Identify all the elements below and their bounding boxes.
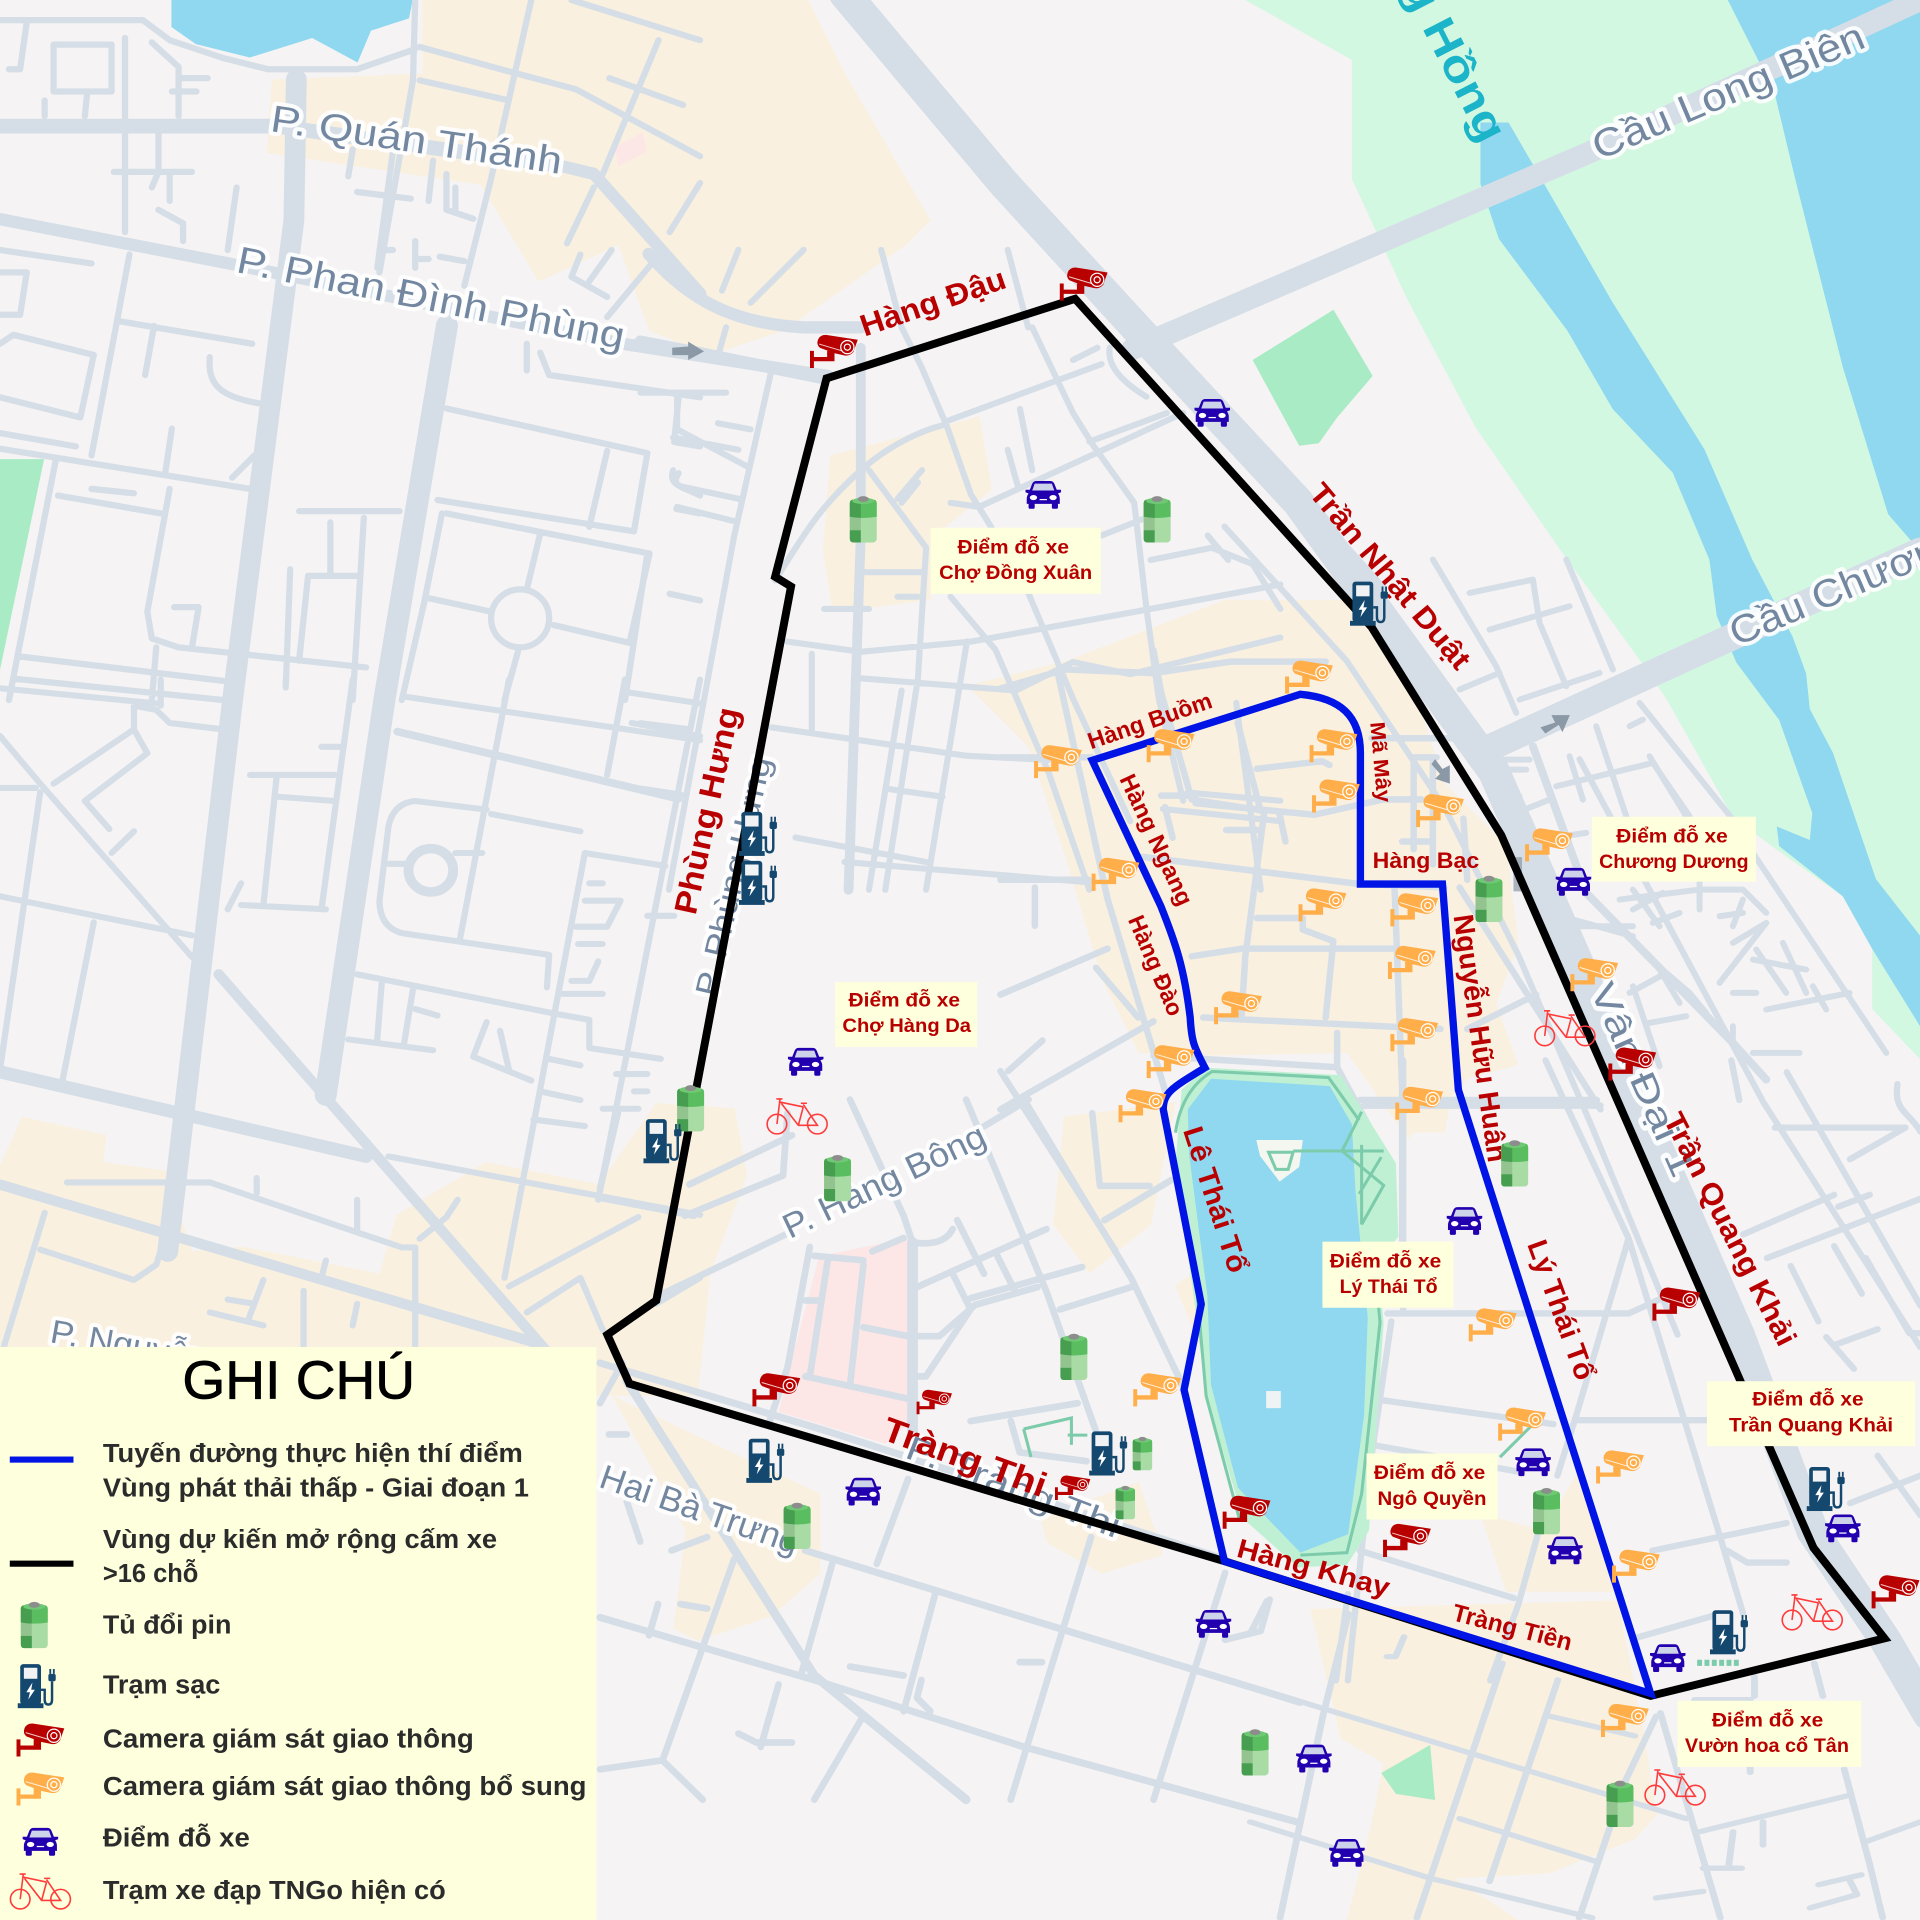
legend text: additional camera: Camera giám sát giao thông bổ sung: [103, 1773, 587, 1801]
map: main river east: [1728, 0, 1920, 551]
callout: Vườn hoa cổ Tân parking: Vườn hoa cổ Tân: [1685, 1736, 1849, 1757]
icons: battery swap cabinets: [677, 496, 1633, 1827]
street label: Hàng Ngang: Hàng Ngang: [1115, 770, 1198, 910]
road: Long Biên bridge: [1133, 0, 1920, 349]
icons: parking points: [788, 399, 1861, 1867]
callout: Ngô Quyền parking: Ngô Quyền: [1378, 1489, 1487, 1510]
legend icon: parking: [23, 1828, 58, 1856]
road: P. Phan Đình Phùng: [0, 219, 828, 376]
lake path: [1176, 1071, 1384, 1555]
route: pilot low-emission zone (blue): [1092, 694, 1651, 1693]
icons: TNGo bike stations: [767, 1011, 1842, 1805]
street label: Trần Nhật Duật: Trần Nhật Duật: [1302, 477, 1477, 676]
legend: black line swatch: [10, 1561, 73, 1567]
map label: Cầu Long Biên: Cầu Long Biên: [1586, 15, 1871, 169]
map: Red River channel: [1480, 122, 1920, 1026]
street label: Lê Thái Tổ: Lê Thái Tổ: [1177, 1122, 1254, 1276]
legend icon: charger: [18, 1664, 56, 1708]
callout: Trần Quang Khải parking: Điểm đỗ xe: [1752, 1389, 1864, 1411]
legend text: pilot route: Tuyến đường thực hiện thí điểm: [103, 1440, 523, 1468]
street label: Hàng Bạc: Hàng Bạc: [1373, 848, 1479, 873]
legend text: expansion zone: [103, 1526, 497, 1588]
legend text: pilot route: [103, 1440, 529, 1502]
map label: P. Phùng Hưng: P. Phùng Hưng: [688, 753, 778, 1000]
callout: Lý Thái Tổ parking: [1322, 1242, 1453, 1308]
red street labels: [667, 262, 1803, 1656]
legend: blue line swatch: [10, 1457, 73, 1463]
small green path near Cửa Nam: [1024, 1418, 1087, 1457]
callout: Chương Dương parking: Chương Dương: [1599, 852, 1749, 873]
map label: Văn Đại: Vân Đại 1: [1582, 976, 1703, 1183]
callout: Ngô Quyền parking: Điểm đỗ xe: [1374, 1462, 1485, 1484]
callout: Trần Quang Khải parking: Trần Quang Khải: [1729, 1415, 1893, 1436]
legend icon: battery: [21, 1602, 48, 1648]
legend text: camera: Camera giám sát giao thông: [103, 1725, 474, 1753]
street label: Lý Thái Tổ: Lý Thái Tổ: [1521, 1236, 1601, 1384]
road: diagonal Quán Thánh: [558, 165, 700, 294]
callout: Chợ Đồng Xuân parking: [931, 528, 1101, 594]
legend text: expansion zone: Vùng dự kiến mở rộng cấm xe: [103, 1526, 497, 1554]
park around lake: [1176, 1068, 1398, 1567]
legend text: battery: Tủ đổi pin: [103, 1611, 231, 1639]
map: West Lake corner: [171, 0, 413, 62]
legend icon: camera: [17, 1723, 64, 1757]
callout: Chợ Hàng Da parking: Chợ Hàng Da: [842, 1016, 971, 1037]
street label: Hàng Đậu: Hàng Đậu: [856, 262, 1010, 343]
legend icon: additional camera: [17, 1772, 64, 1806]
map label: P. Nguyễn: P. Nguyễn: [48, 1312, 211, 1378]
callout: Chợ Hàng Da parking: [835, 982, 977, 1047]
icons: charging stations: [643, 582, 1845, 1654]
small garden near Vườn hoa: [1697, 1660, 1739, 1665]
map: small pink block: [615, 132, 647, 167]
callout: Chương Dương parking: [1592, 817, 1756, 882]
map label: P. Tràng Thi: P. Tràng Thi: [901, 1429, 1126, 1546]
green path near Ngô Quyền: [1500, 1418, 1538, 1457]
legend panel: [0, 1347, 596, 1920]
Hoàn Kiếm lake and park: [1176, 1068, 1398, 1567]
route: proposed expansion zone (black): [607, 299, 1884, 1696]
callout: Ngô Quyền parking: [1367, 1453, 1498, 1520]
road: Trần Nhật Duật / Trần Quang Khải arterial: [845, 0, 1920, 1714]
street label: Hàng Buồm: Hàng Buồm: [1084, 687, 1215, 754]
icons: traffic cameras: [752, 268, 1919, 1608]
lake water: [1188, 1079, 1368, 1553]
road: left avenue: [168, 80, 296, 1251]
legend text: bike: Trạm xe đạp TNGo hiện có: [103, 1877, 446, 1905]
callout: Chợ Đồng Xuân parking: Chợ Đồng Xuân: [939, 563, 1092, 584]
street label: Phùng Hưng: Phùng Hưng: [667, 704, 746, 917]
street label: Tràng Thi: Tràng Thi: [878, 1411, 1052, 1505]
direction arrows on map: [672, 342, 1570, 891]
map: parks: [0, 310, 1435, 1800]
map: hospital block: [779, 1238, 912, 1444]
map label: P. Phan Đình Phùng: P. Phan Đình Phùng: [233, 239, 628, 358]
callout: Vườn hoa cổ Tân parking: Điểm đỗ xe: [1712, 1710, 1823, 1732]
street label: Mã Mây: Mã Mây: [1365, 721, 1395, 804]
street label: Tràng Tiền: Tràng Tiền: [1450, 1600, 1575, 1656]
road: right avenue: [326, 326, 447, 1095]
street label: Hàng Đào: Hàng Đào: [1123, 911, 1189, 1020]
road: P. Quán Thánh: [0, 126, 558, 165]
road: side carriageways: [1139, 318, 1920, 1347]
map: river bank vegetation: [1245, 0, 1920, 1059]
icons: additional traffic cameras: [1034, 661, 1660, 1737]
legend text: expansion zone: >16 chỗ: [103, 1558, 198, 1588]
legend text: charger: Trạm sạc: [103, 1671, 220, 1699]
street label: Trần Quang Khải: Trần Quang Khải: [1657, 1107, 1803, 1351]
legend text: parking: Điểm đỗ xe: [103, 1823, 250, 1853]
map label: P. Quán Thánh: P. Quán Thánh: [268, 98, 565, 183]
callout: Lý Thái Tổ parking: Điểm đỗ xe: [1330, 1250, 1441, 1272]
road: Chương Dương bridge: [1491, 551, 1920, 747]
legend icon: bike: [10, 1874, 70, 1909]
square monument on lake: [1266, 1391, 1281, 1408]
street label: Hàng Khay: Hàng Khay: [1234, 1533, 1393, 1603]
callout: Trần Quang Khải parking: [1707, 1381, 1915, 1446]
callout: Chương Dương parking: Điểm đỗ xe: [1616, 825, 1728, 847]
callout: Lý Thái Tổ parking: Lý Thái Tổ: [1340, 1277, 1438, 1298]
map label: Hai Bà Trưng: Hai Bà Trưng: [595, 1458, 804, 1562]
callout: Vườn hoa cổ Tân parking: [1678, 1701, 1861, 1767]
legend title: GHI CHÚ: [182, 1350, 415, 1410]
street label: Nguyễn Hữu Huân: Nguyễn Hữu Huân: [1448, 912, 1513, 1164]
legend text: pilot route: Vùng phát thải thấp - Giai đoạn 1: [103, 1474, 529, 1502]
callout: Chợ Đồng Xuân parking: Điểm đỗ xe: [958, 536, 1069, 558]
map label: P. Hàng Bông: P. Hàng Bông: [777, 1117, 992, 1246]
callout: Chợ Hàng Da parking: Điểm đỗ xe: [849, 990, 960, 1012]
lake island: [1256, 1140, 1303, 1182]
